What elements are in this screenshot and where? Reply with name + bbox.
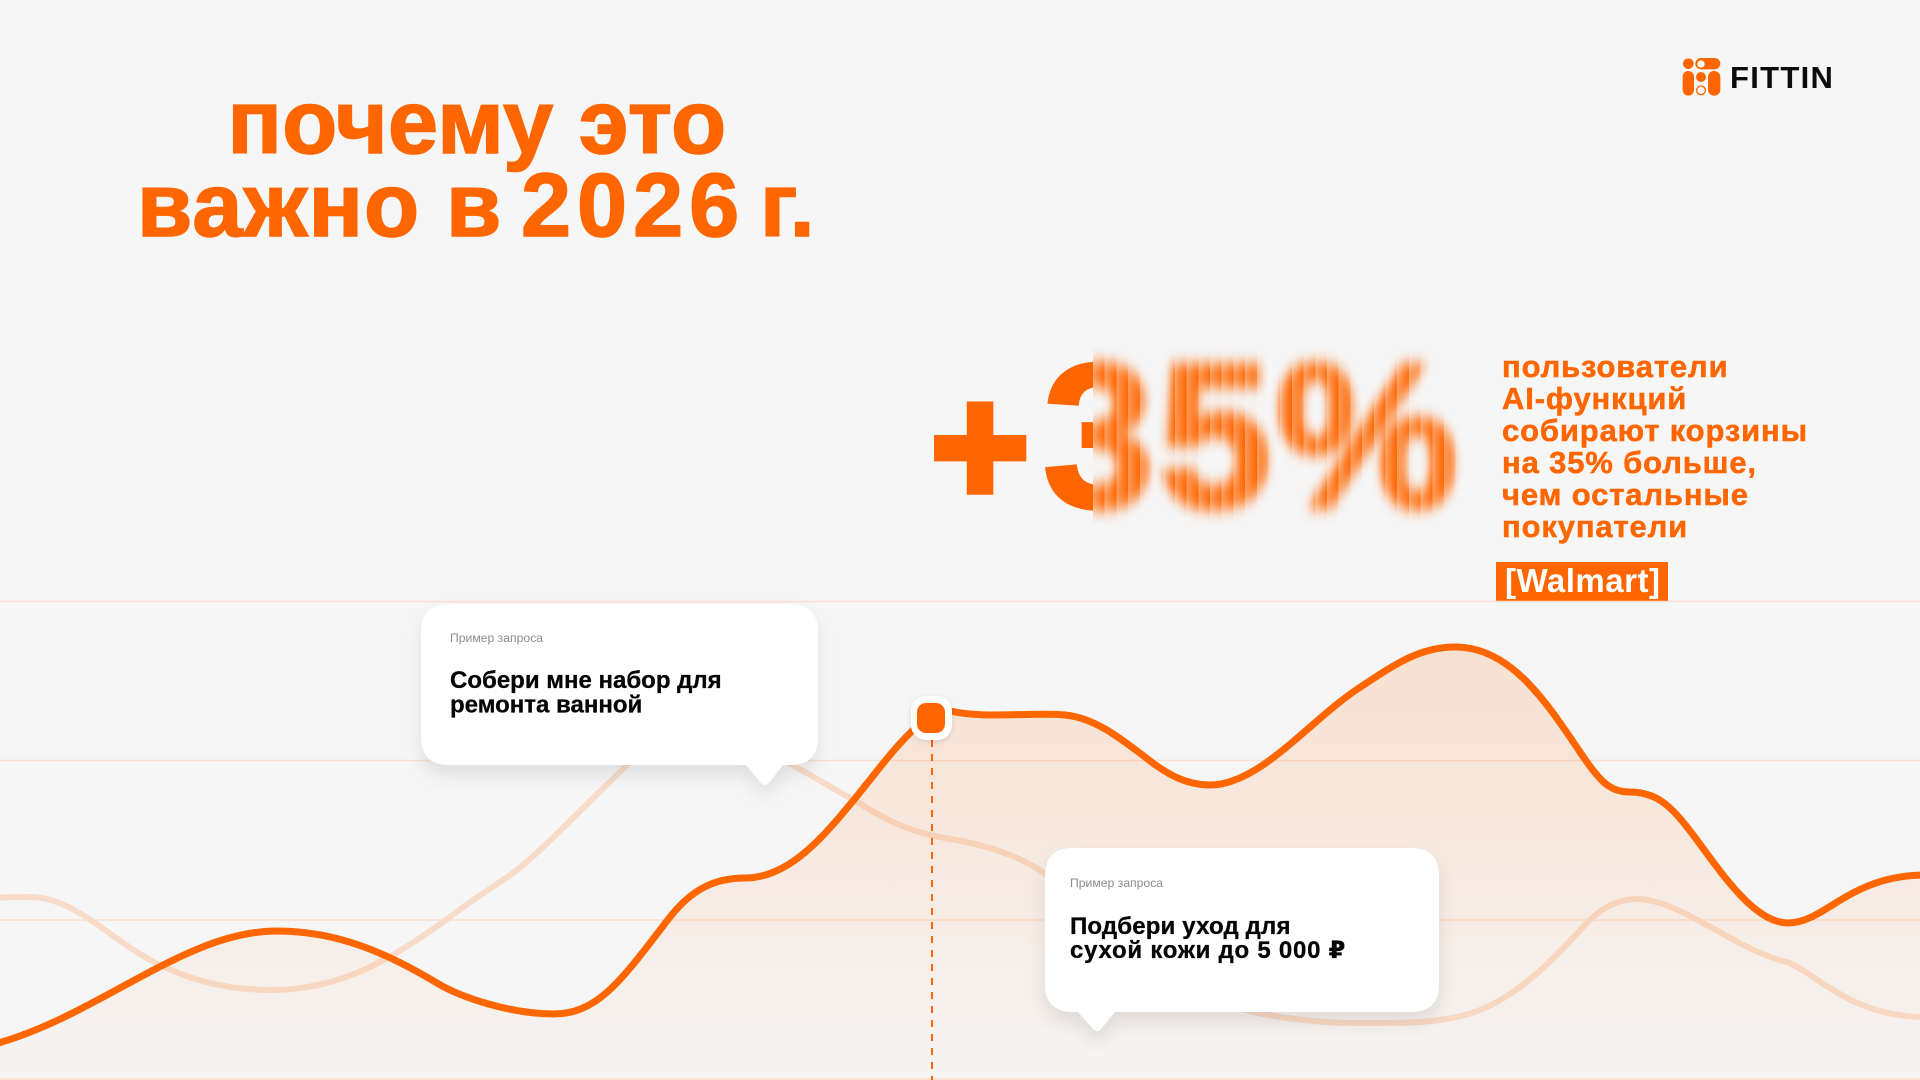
- grid lines: [0, 602, 1920, 1079]
- stat description: [1502, 349, 1808, 544]
- stat description: пользователи: [1502, 349, 1728, 384]
- sharp part of number: 3: [1042, 321, 1157, 551]
- stat description: чем остальные: [1502, 477, 1749, 512]
- stat description: на 35% больше,: [1502, 445, 1757, 480]
- callout label: Пример запроса: [450, 631, 543, 645]
- logo wordmark: FITTIN: [1730, 60, 1834, 95]
- title: 2026: [521, 156, 745, 256]
- chart: dashed marker line: [931, 740, 933, 1080]
- blurred part of number: [1093, 350, 1462, 523]
- stat description: покупатели: [1502, 509, 1688, 544]
- callout bubble: [421, 604, 818, 785]
- callout query text: сухой кожи до 5 000 ₽: [1070, 937, 1346, 964]
- fluted glass ribs: [1093, 352, 1460, 520]
- callout: bathroom renovation query: [421, 604, 818, 785]
- logo: FITTIN: [1683, 58, 1834, 96]
- title: в: [446, 156, 503, 256]
- title: [137, 73, 816, 256]
- callout query text: ремонта ванной: [450, 692, 642, 718]
- icon: logo mark: [1683, 58, 1720, 96]
- chart marker: [911, 696, 952, 740]
- chart: secondary pale line: [0, 741, 1920, 1023]
- callout query text: Подбери уход для: [1070, 913, 1291, 940]
- chart: area under main line: [0, 647, 1920, 1080]
- callout bubble: [1045, 848, 1439, 1031]
- stat description: AI-функций: [1502, 381, 1687, 416]
- callout query text: [1070, 913, 1346, 964]
- source tag: Walmart: [Walmart]: [1505, 562, 1660, 599]
- blurred part of number: 35%: [1040, 321, 1461, 551]
- title: важно: [137, 156, 420, 256]
- callout query text: Собери мне набор для: [450, 667, 722, 694]
- title: почему это: [227, 73, 727, 173]
- title: г.: [760, 156, 816, 256]
- stat description: собирают корзины: [1502, 413, 1808, 448]
- callout query text: [450, 667, 722, 718]
- plus sign: +: [931, 352, 1029, 540]
- big stat: +35%: [934, 350, 1462, 523]
- chart: main orange line: [0, 647, 1920, 1044]
- callout label: Пример запроса: [1070, 876, 1163, 890]
- callout: dry skin care query: [1045, 848, 1439, 1031]
